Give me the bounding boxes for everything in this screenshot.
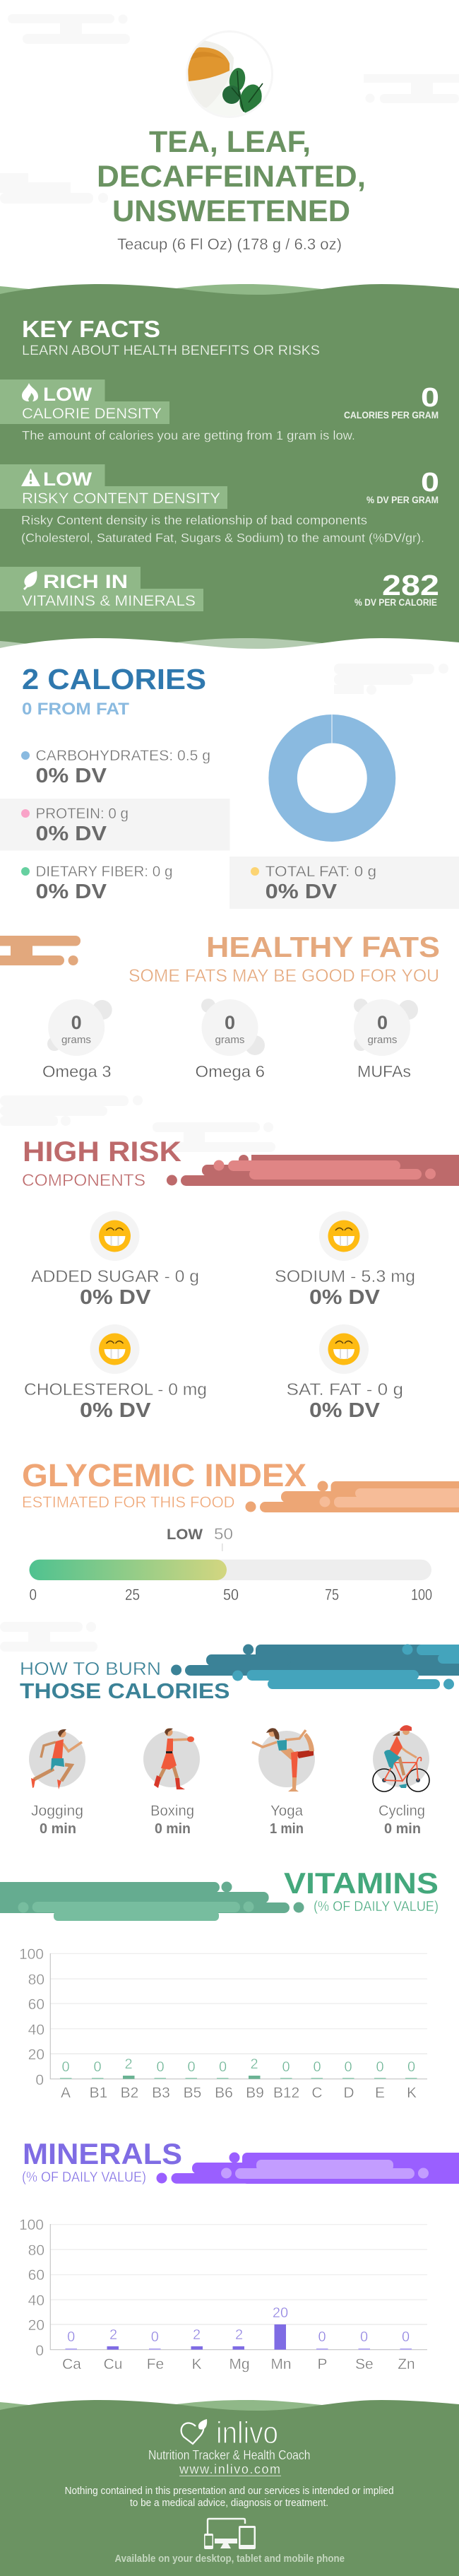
bar chart: vitamins: 80 (28, 1972, 44, 1988)
bar chart: minerals: Fe (147, 2356, 164, 2372)
serving size: Teacup (6 Fl Oz) (178 g / 6.3 oz) (117, 235, 342, 253)
food image: teacup and mint leaves (185, 30, 273, 119)
subheading: COMPONENTS (22, 1171, 145, 1190)
gauge (30, 1525, 432, 1604)
bar chart: minerals: Se (355, 2356, 374, 2372)
bar chart: vitamins: 0 (219, 2059, 227, 2075)
heading: key facts: KEY FACTS (22, 316, 160, 342)
carbohydrates (21, 748, 210, 787)
gauge: 100 (411, 1586, 432, 1604)
bar chart: vitamins: K (407, 2085, 417, 2101)
dietary fiber: DIETARY FIBER: 0 g (35, 864, 172, 880)
bar chart: minerals: 20 (28, 2317, 44, 2334)
icon: cyclist (373, 1725, 429, 1792)
bar chart: vitamins: 0 (313, 2059, 321, 2075)
yoga: Yoga (270, 1803, 303, 1819)
mufas: 0 (377, 1012, 388, 1033)
icon: boxer (143, 1729, 200, 1789)
bar chart: vitamins: 0 (35, 2072, 44, 2088)
tagline: Nutrition Tracker & Health Coach (148, 2448, 311, 2462)
bar chart: minerals: K (192, 2356, 202, 2372)
cholesterol (24, 1324, 207, 1422)
jogging: Jogging (31, 1803, 83, 1819)
icon: smiley (90, 1211, 140, 1261)
risky content density row: (Cholesterol, Saturated Fat, Sugars & Sodium) to the amount (%DV/gr). (21, 531, 424, 545)
icon: smiley (90, 1324, 140, 1374)
sodium: SODIUM - 5.3 mg (275, 1267, 415, 1286)
saturated fat: 0% DV (309, 1399, 381, 1422)
cycling: 0 min (384, 1821, 421, 1837)
omega 3: Omega 3 (42, 1062, 112, 1081)
saturated fat: SAT. FAT - 0 g (287, 1380, 403, 1399)
risky content density row (0, 464, 439, 545)
bar chart: minerals (19, 2217, 427, 2372)
panel: key facts (0, 284, 459, 657)
heading: healthy fats: HEALTHY FATS (206, 931, 440, 963)
banner shape (0, 936, 81, 965)
saturated fat (287, 1324, 403, 1422)
bar chart: minerals: 80 (28, 2242, 44, 2259)
sodium: 0% DV (309, 1286, 381, 1309)
bar chart: minerals: 20 (273, 2305, 288, 2321)
boxing (143, 1729, 200, 1837)
heading: glycemic index: GLYCEMIC INDEX (22, 1457, 306, 1493)
icon: jogger (29, 1729, 85, 1789)
carbohydrates: 0% DV (35, 765, 107, 787)
gauge: 25 (125, 1586, 140, 1604)
rich in row: 282 (382, 569, 439, 601)
banner shape (167, 1155, 459, 1186)
omega 6 (195, 999, 265, 1081)
calorie density row: CALORIE DENSITY (22, 406, 162, 422)
omega 3: grams (61, 1034, 91, 1046)
bar chart: minerals: Zn (398, 2356, 415, 2372)
bar chart: vitamins: B2 (121, 2085, 138, 2101)
sodium (275, 1211, 415, 1309)
boxing: 0 min (155, 1821, 191, 1837)
bar chart: vitamins: D (343, 2085, 354, 2101)
total fat: 0% DV (266, 881, 338, 903)
cholesterol: CHOLESTEROL - 0 mg (24, 1380, 207, 1399)
bar chart: minerals: 2 (109, 2327, 117, 2343)
banner shape (0, 1881, 304, 1921)
icon: smiley (319, 1324, 369, 1374)
omega 3: 0 (71, 1012, 82, 1033)
logo: inlivo: inlivo (216, 2416, 278, 2450)
footer (0, 2400, 459, 2576)
heading: THOSE CALORIES (20, 1678, 230, 1703)
heading: high risk: HIGH RISK (23, 1136, 181, 1168)
risky content density row: RISKY CONTENT DENSITY (22, 490, 220, 507)
mufas (354, 999, 418, 1081)
subheading: SOME FATS MAY BE GOOD FOR YOU (129, 966, 439, 986)
bar chart: vitamins: B1 (90, 2085, 107, 2101)
bar chart: minerals: 0 (67, 2329, 75, 2345)
boxing: Boxing (150, 1803, 194, 1819)
bar chart: vitamins: 0 (407, 2059, 415, 2075)
added sugar: ADDED SUGAR - 0 g (31, 1267, 199, 1286)
subheading: from fat: 0 FROM FAT (22, 700, 129, 719)
gauge: 75 (325, 1586, 339, 1604)
panel: high risk components (22, 1136, 459, 1422)
heading: minerals: MINERALS (23, 2137, 182, 2170)
panel: how to burn those calories (20, 1644, 459, 1837)
jogging (29, 1729, 85, 1837)
logo: inlivo (181, 2416, 278, 2450)
icon: smiley (319, 1211, 369, 1261)
icon: yoga pose (252, 1728, 315, 1792)
heading: HOW TO BURN (20, 1658, 161, 1679)
bar chart: vitamins: 100 (19, 1946, 44, 1963)
bar chart: minerals: 40 (28, 2293, 44, 2309)
bar chart: vitamins: 0 (156, 2059, 165, 2075)
bar chart: vitamins: A (61, 2085, 71, 2101)
omega 6: Omega 6 (195, 1062, 265, 1081)
yoga: 1 min (270, 1821, 304, 1837)
bar chart: vitamins: B12 (273, 2085, 299, 2101)
bar chart: vitamins: 20 (28, 2047, 44, 2063)
dietary fiber: 0% DV (35, 881, 107, 903)
bar chart: vitamins (19, 1946, 427, 2101)
title: TEA, LEAF, (149, 125, 311, 159)
bar chart: vitamins: 2 (124, 2057, 133, 2072)
jogging: 0 min (40, 1821, 76, 1837)
bar chart: minerals: Ca (62, 2356, 81, 2372)
banner shape (246, 1481, 459, 1512)
title: DECAFFEINATED, (97, 160, 366, 194)
bar chart: minerals: P (317, 2356, 328, 2372)
carbohydrates: CARBOHYDRATES: 0.5 g (35, 748, 210, 764)
heading: vitamins: VITAMINS (284, 1866, 439, 1900)
added sugar (31, 1211, 199, 1309)
risky content density row: % DV PER GRAM (366, 495, 439, 505)
bar chart: vitamins: E (375, 2085, 385, 2101)
banner shape (171, 1644, 459, 1689)
gauge: 50 (223, 1586, 239, 1604)
panel: calories (0, 663, 459, 909)
bar chart: vitamins: B6 (215, 2085, 233, 2101)
heading: calories: 2 CALORIES (22, 663, 206, 695)
added sugar: 0% DV (80, 1286, 151, 1309)
bar chart: vitamins: 0 (93, 2059, 102, 2075)
subheading: (% OF DAILY VALUE) (22, 2170, 146, 2185)
protein (0, 799, 230, 851)
icon: leaf (23, 571, 37, 590)
gauge: 0 (30, 1586, 37, 1604)
calorie density row: 0 (421, 383, 439, 413)
bar chart: vitamins: 0 (61, 2059, 70, 2075)
mufas: MUFAs (357, 1062, 411, 1081)
yoga (252, 1728, 315, 1837)
availability note: Available on your desktop, tablet and mobile phone (114, 2553, 345, 2565)
cycling (373, 1725, 429, 1837)
icon: warning triangle (21, 469, 40, 486)
bar chart: minerals: 100 (19, 2217, 44, 2233)
subheading: (% OF DAILY VALUE) (314, 1899, 439, 1915)
subheading: ESTIMATED FOR THIS FOOD (22, 1493, 234, 1511)
bar chart: minerals: 2 (235, 2327, 243, 2343)
omega 6: grams (215, 1034, 244, 1046)
gauge: LOW (167, 1527, 203, 1543)
rich in row: % DV PER CALORIE (354, 597, 437, 608)
gauge: 50 (214, 1525, 233, 1543)
bar chart: minerals: 0 (318, 2329, 326, 2345)
bar chart: vitamins: 60 (28, 1996, 44, 2013)
risky content density row: LOW (43, 469, 93, 490)
bar chart: vitamins: C (311, 2085, 323, 2101)
omega 6: 0 (225, 1012, 235, 1033)
bar chart: vitamins: 0 (282, 2059, 290, 2075)
title: UNSWEETENED (112, 194, 350, 228)
bar chart: vitamins: 2 (250, 2057, 258, 2072)
panel: glycemic index (22, 1457, 459, 1604)
dietary fiber (21, 864, 172, 903)
banner shape (157, 2153, 459, 2184)
bar chart: vitamins: 0 (344, 2059, 352, 2075)
cycling: Cycling (378, 1803, 425, 1819)
bar chart: vitamins: B9 (246, 2085, 264, 2101)
bar chart: vitamins: B3 (152, 2085, 170, 2101)
bar chart: minerals: 0 (35, 2343, 44, 2359)
omega 3 (42, 999, 112, 1081)
bar chart: minerals: Mn (270, 2356, 292, 2372)
risky content density row: 0 (421, 468, 439, 498)
subheading: LEARN ABOUT HEALTH BENEFITS OR RISKS (22, 343, 320, 358)
cholesterol: 0% DV (80, 1399, 151, 1422)
total fat (230, 857, 459, 909)
bar chart: minerals: 2 (193, 2327, 201, 2343)
calorie density row: CALORIES PER GRAM (344, 410, 439, 420)
total fat: TOTAL FAT: 0 g (266, 864, 376, 880)
panel: healthy fats (0, 931, 440, 1081)
website link: www.inlivo.com (179, 2462, 280, 2476)
calorie density row (0, 380, 439, 442)
icon: flame (22, 383, 38, 401)
rich in row: VITAMINS & MINERALS (22, 593, 196, 609)
disclaimer: Nothing contained in this presentation and our services is intended or implied (65, 2485, 394, 2497)
calorie density row: LOW (43, 384, 93, 405)
protein: 0% DV (35, 823, 107, 845)
disclaimer: to be a medical advice, diagnosis or treatment. (130, 2497, 328, 2509)
panel: vitamins (0, 1866, 439, 2101)
rich in row: RICH IN (43, 571, 128, 592)
heading (20, 1658, 230, 1703)
bar chart: vitamins: B5 (184, 2085, 201, 2101)
protein: PROTEIN: 0 g (35, 806, 129, 822)
disclaimer (65, 2485, 394, 2509)
bar chart: vitamins: 40 (28, 2022, 44, 2038)
bar chart: minerals: 60 (28, 2267, 44, 2283)
bar chart: minerals: 0 (151, 2329, 159, 2345)
mufas: grams (367, 1034, 397, 1046)
rich in row (0, 567, 439, 611)
bar chart: minerals: Mg (229, 2356, 250, 2372)
title (97, 125, 366, 228)
donut chart (283, 714, 381, 828)
panel: minerals (19, 2137, 459, 2372)
bar chart: minerals: Cu (104, 2356, 122, 2372)
bar chart: vitamins: 0 (187, 2059, 196, 2075)
bar chart: minerals: 0 (402, 2329, 410, 2345)
calorie density row: The amount of calories you are getting from 1 gram is low. (22, 428, 355, 442)
bar chart: vitamins: 0 (376, 2059, 384, 2075)
risky content density row: Risky Content density is the relationship of bad components (21, 513, 367, 527)
bar chart: minerals: 0 (360, 2329, 368, 2345)
icon: devices (204, 2519, 256, 2549)
